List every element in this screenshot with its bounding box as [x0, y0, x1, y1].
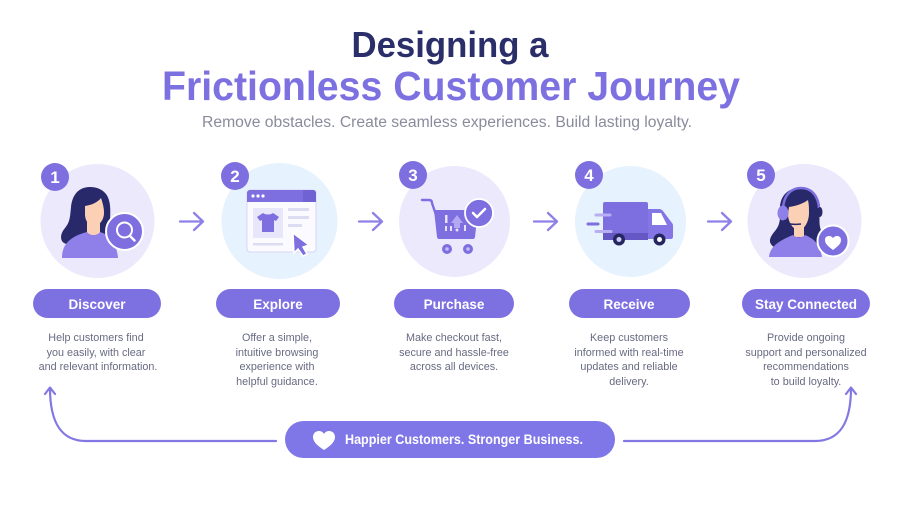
icon: delivery truck — [575, 166, 686, 277]
description: informed with real-time — [574, 347, 684, 359]
banner: happier customers: Happier Customers. Stronger Business. — [345, 432, 583, 447]
badge 5 — [747, 161, 775, 189]
badge 1: 1 — [50, 168, 60, 187]
banner: happier customers — [285, 421, 615, 458]
description — [399, 332, 509, 373]
panel: step 3 purchase — [394, 161, 514, 373]
description: recommendations — [763, 361, 850, 373]
pill: Stay Connected: Stay Connected — [755, 297, 857, 312]
description — [236, 332, 318, 388]
arrow 1 to 2 — [180, 213, 203, 230]
badge 3: 3 — [408, 166, 418, 185]
panel: step 5 stay connected — [742, 161, 870, 388]
description: Help customers find — [48, 332, 144, 344]
description: intuitive browsing — [236, 347, 318, 359]
description: secure and hassle-free — [399, 347, 509, 359]
arrow 2 to 3 — [359, 213, 382, 230]
arrow 3 to 4 — [534, 213, 557, 230]
description: helpful guidance. — [236, 376, 318, 388]
icon: browser window with cursor — [222, 163, 338, 279]
badge 2 — [221, 162, 249, 190]
description: across all devices. — [410, 361, 498, 373]
arrow: return left — [45, 388, 276, 441]
description: to build loyalty. — [771, 376, 841, 388]
pill: Receive — [569, 289, 690, 318]
title — [162, 24, 740, 109]
pill: Explore: Explore — [253, 297, 303, 312]
icon: woman with magnifier — [40, 164, 154, 278]
arrow: return right — [624, 388, 856, 441]
panel: step 2 explore — [216, 162, 340, 388]
pill: Discover — [33, 289, 161, 318]
description — [574, 332, 684, 388]
icon: shopping cart with check — [399, 166, 510, 277]
badge 5: 5 — [756, 166, 766, 185]
description: experience with — [239, 361, 315, 373]
pill: Explore — [216, 289, 340, 318]
badge 4: 4 — [584, 166, 594, 185]
pill: Purchase — [394, 289, 514, 318]
pill: Receive: Receive — [603, 297, 655, 312]
description: Provide ongoing — [767, 332, 845, 344]
description — [745, 332, 867, 388]
badge 3 — [399, 161, 427, 189]
panel: step 4 receive — [569, 161, 690, 388]
title: Designing a — [352, 24, 549, 65]
description: you easily, with clear — [47, 347, 146, 359]
arrow 4 to 5 — [708, 213, 731, 230]
badge 4 — [575, 161, 603, 189]
icon: support agent with heart — [748, 164, 862, 278]
subtitle: Remove obstacles. Create seamless experiences. Build lasting loyalty. — [202, 114, 692, 131]
description: Offer a simple, — [242, 332, 312, 344]
description: Keep customers — [590, 332, 669, 344]
pill: Purchase: Purchase — [424, 297, 485, 312]
description: updates and reliable — [580, 361, 678, 373]
description: delivery. — [609, 376, 649, 388]
description: and relevant information. — [39, 361, 157, 373]
badge 1 — [41, 163, 69, 191]
description: Make checkout fast, — [406, 332, 502, 344]
panel: step 1 discover — [33, 163, 161, 373]
pill: Stay Connected — [742, 289, 870, 318]
pill: Discover: Discover — [68, 297, 126, 312]
badge 2: 2 — [230, 167, 240, 186]
description — [39, 332, 157, 373]
description: support and personalized — [745, 347, 867, 359]
title: Frictionless Customer Journey — [162, 63, 740, 109]
